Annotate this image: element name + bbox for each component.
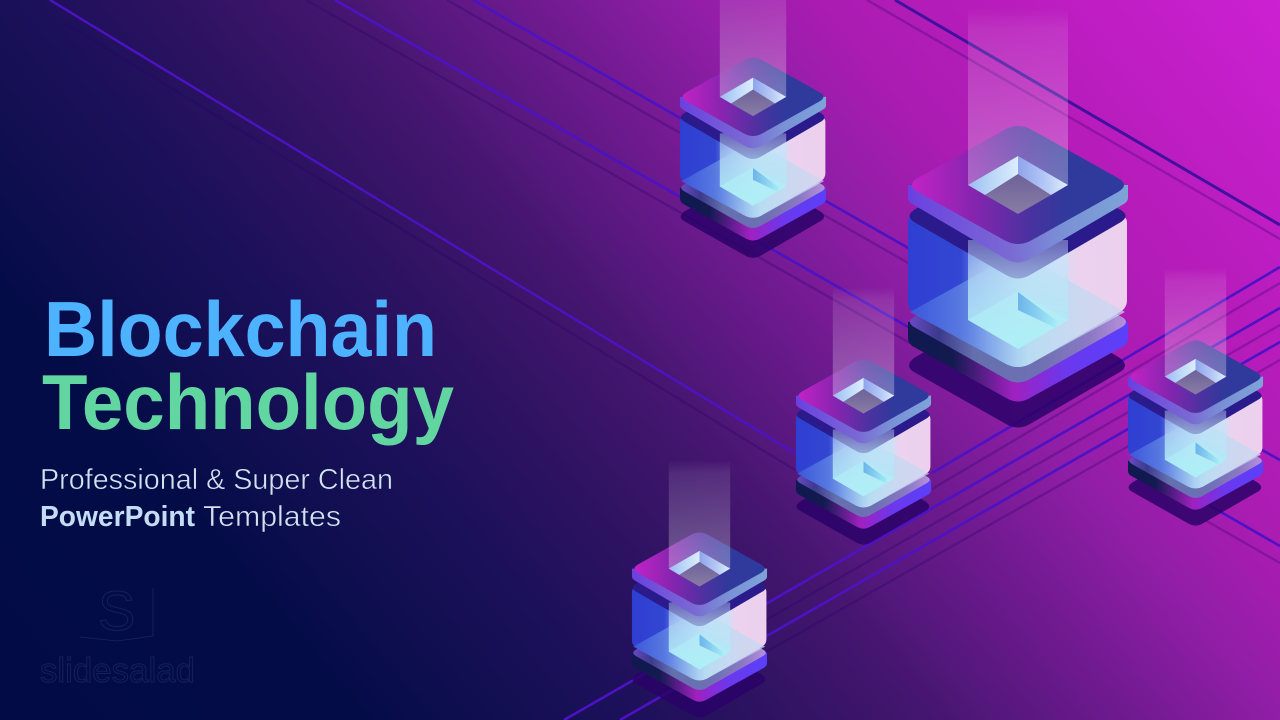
watermark logo: S (98, 579, 135, 642)
title: Blockchain (44, 285, 437, 373)
cube: top centre node (680, 0, 826, 258)
cube: lower left node (632, 460, 767, 718)
subtitle (40, 464, 393, 533)
cube: right node (1128, 268, 1263, 526)
cube: large node (908, 8, 1128, 428)
subtitle: PowerPoint (40, 501, 195, 533)
title: Technology (42, 358, 454, 446)
watermark logo: slidesalad (40, 652, 195, 690)
title (42, 285, 454, 446)
cube: middle node (796, 287, 931, 545)
watermark logo (40, 579, 195, 690)
subtitle: Templates (203, 501, 341, 533)
subtitle: Professional & Super Clean (40, 464, 393, 496)
